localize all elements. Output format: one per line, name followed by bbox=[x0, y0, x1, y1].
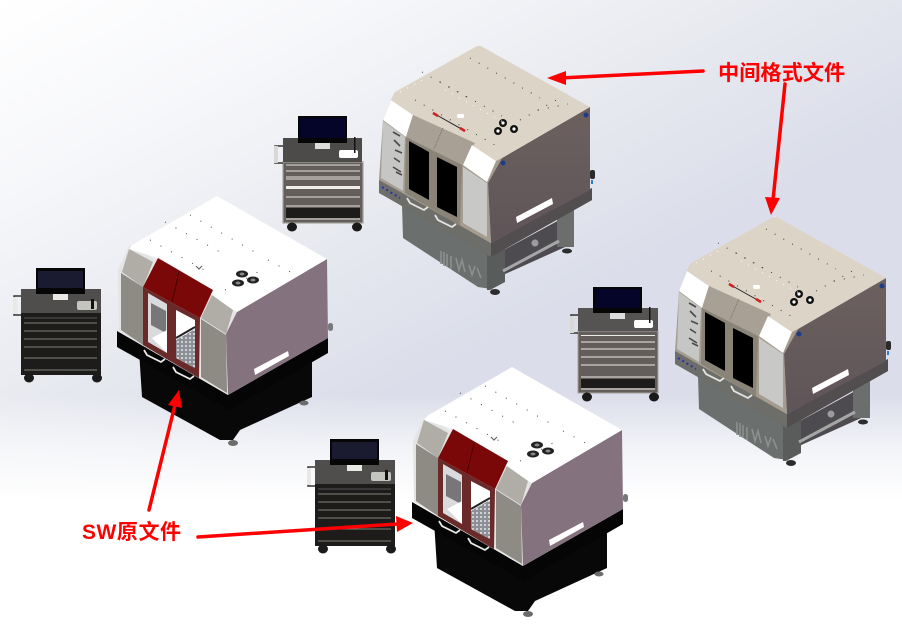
machine base bbox=[434, 521, 607, 617]
label: SW native files: SW原文件 bbox=[82, 520, 181, 544]
tool cart: intermediate format, top bbox=[274, 116, 363, 232]
machine: SW native, bottom bbox=[412, 367, 628, 617]
machine: intermediate format, right bbox=[675, 216, 891, 466]
machine enclosure bbox=[675, 216, 891, 428]
machine enclosure bbox=[117, 196, 333, 410]
machine base bbox=[402, 205, 574, 295]
arrow: label to left machine bbox=[149, 390, 182, 510]
arrow: label to top machine bbox=[547, 71, 703, 85]
machine enclosure bbox=[412, 367, 628, 581]
tool cart: intermediate format, right bbox=[570, 287, 659, 402]
machine enclosure bbox=[379, 45, 595, 257]
tool cart: SW native, bottom bbox=[307, 439, 396, 554]
machine base bbox=[139, 350, 312, 446]
label: intermediate format files: 中间格式文件 bbox=[718, 60, 845, 85]
machine: intermediate format, top bbox=[379, 45, 595, 295]
machine: SW native, left bbox=[117, 196, 333, 446]
machine base bbox=[698, 376, 870, 466]
arrow: label to right machine bbox=[765, 84, 785, 215]
tool cart: SW native, left bbox=[13, 268, 102, 382]
arrow: label to bottom machine bbox=[198, 516, 413, 537]
